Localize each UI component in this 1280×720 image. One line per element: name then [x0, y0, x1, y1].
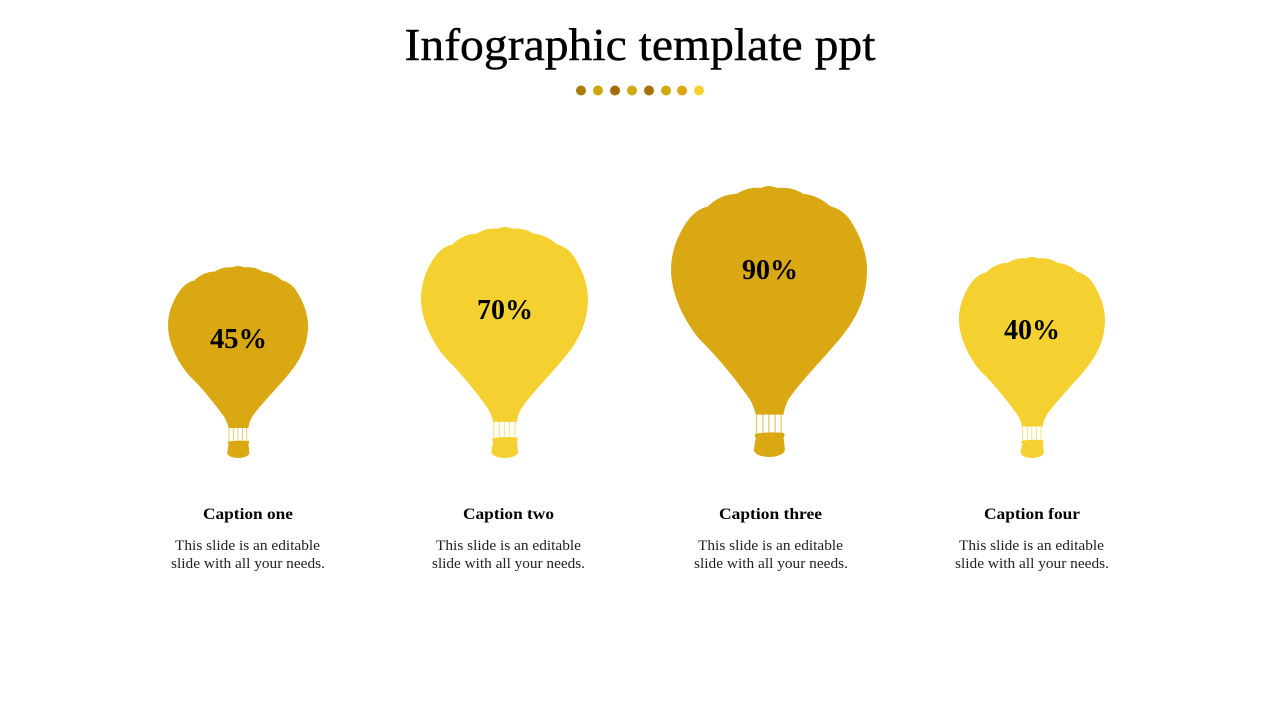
description: caption four: This slide is an editable	[959, 538, 1104, 554]
value: 70%: 70%	[477, 294, 533, 326]
description: caption two: This slide is an editable	[436, 538, 581, 554]
description: caption three: slide with all your needs.	[694, 556, 848, 572]
description: caption two: slide with all your needs.	[432, 556, 585, 572]
description: caption three: This slide is an editable	[698, 538, 843, 554]
caption block three	[694, 506, 848, 572]
description: caption one: slide with all your needs.	[171, 556, 325, 572]
heading: caption one: Caption one	[203, 506, 293, 523]
balloon: 70%	[421, 227, 588, 458]
title: Infographic template ppt	[404, 19, 876, 70]
decorative dotted row under title	[576, 86, 704, 96]
caption block two	[432, 506, 585, 572]
value: 40%: 40%	[1004, 314, 1060, 346]
value: 90%: 90%	[742, 254, 798, 286]
description: caption one: This slide is an editable	[175, 538, 320, 554]
caption block one	[171, 506, 325, 572]
balloon: 90%	[671, 186, 867, 457]
heading: caption four: Caption four	[984, 506, 1080, 523]
value: 45%: 45%	[210, 323, 267, 355]
description: caption four: slide with all your needs.	[955, 556, 1109, 572]
balloon: 40%	[959, 257, 1105, 458]
caption block four	[955, 506, 1109, 572]
heading: caption two: Caption two	[463, 506, 554, 523]
heading: caption three: Caption three	[719, 506, 822, 523]
balloon: 45%	[168, 266, 308, 458]
